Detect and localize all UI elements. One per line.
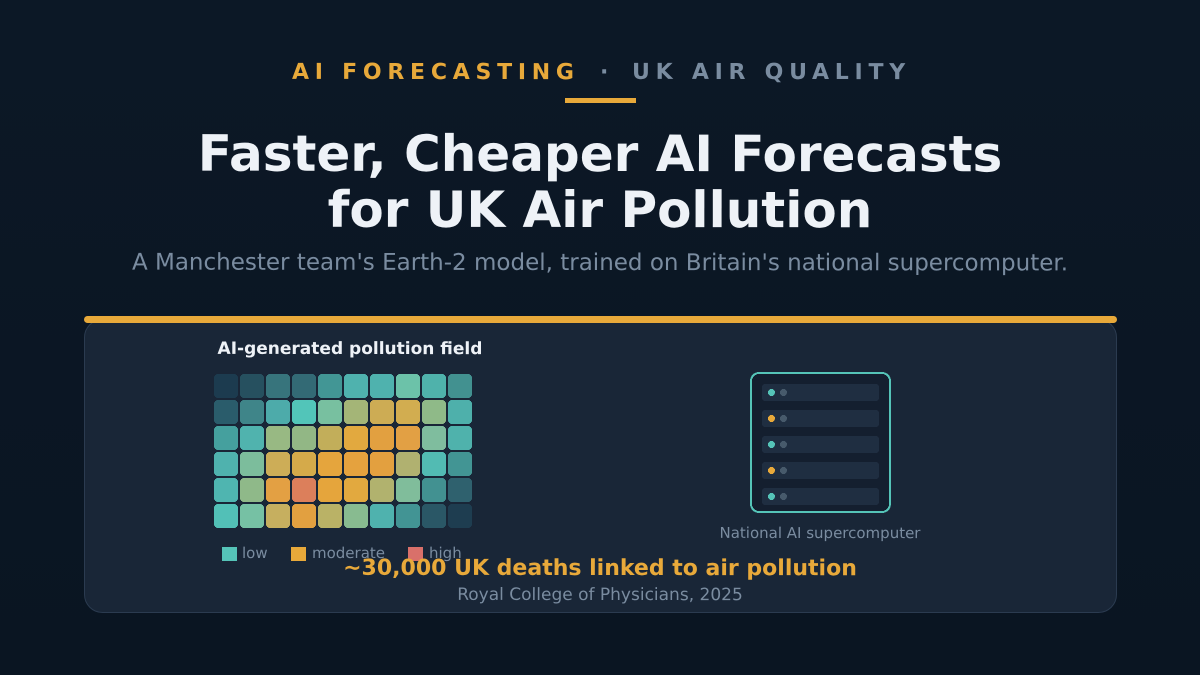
legend: moderate [312, 544, 385, 562]
accent rule [565, 98, 636, 103]
heatmap: pollution field [214, 374, 472, 528]
card top accent bar [84, 316, 1117, 323]
key statistic: ~30,000 UK deaths linked to air pollution [343, 556, 857, 581]
eyebrow heading: AI FORECASTING [292, 60, 580, 85]
subtitle: A Manchester team's Earth-2 model, trained on Britain's national supercomputer. [132, 250, 1068, 276]
source: Royal College of Physicians, 2025 [457, 585, 743, 605]
eyebrow heading [292, 60, 911, 85]
legend: low [242, 544, 268, 562]
title: Faster, Cheaper AI Forecasts [198, 125, 1002, 183]
heatmap heading: AI-generated pollution field [218, 339, 482, 359]
eyebrow heading: · [600, 60, 614, 85]
legend: high [429, 544, 462, 562]
panel: main card [84, 316, 1117, 612]
supercomputer caption: National AI supercomputer [719, 524, 921, 542]
legend [222, 544, 462, 562]
eyebrow heading: UK AIR QUALITY [632, 60, 911, 85]
title: for UK Air Pollution [328, 181, 872, 239]
icon: supercomputer [751, 373, 890, 512]
